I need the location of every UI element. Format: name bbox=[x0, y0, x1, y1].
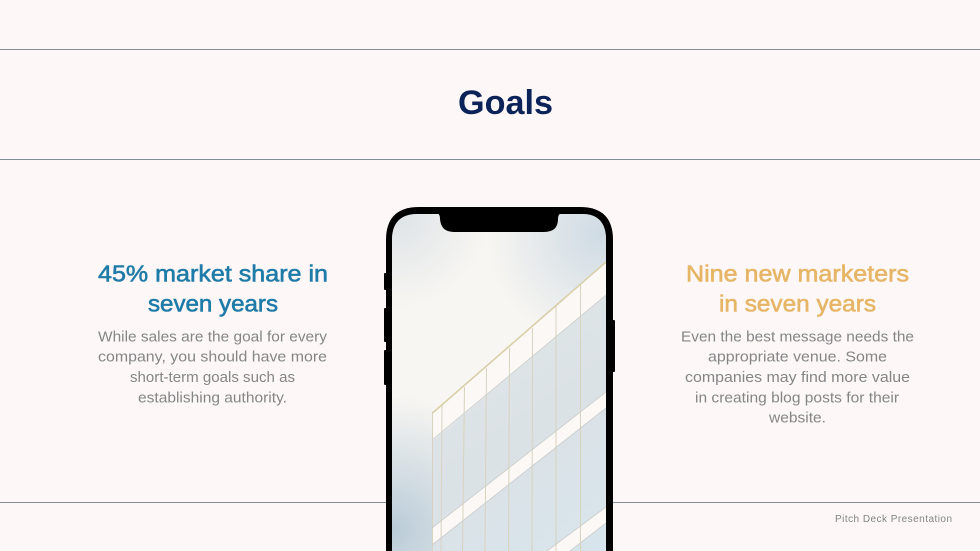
right body text: companies may find more value bbox=[685, 370, 910, 386]
roof edge bbox=[432, 262, 606, 414]
right body text: website. bbox=[768, 410, 826, 426]
phone body bbox=[386, 207, 613, 551]
mullions bbox=[432, 285, 580, 551]
left body text: short-term goals such as bbox=[130, 370, 295, 386]
right body text bbox=[681, 330, 914, 426]
left heading: 45% market share in bbox=[98, 260, 328, 286]
right goal block bbox=[681, 260, 914, 426]
building glass bbox=[432, 295, 606, 551]
phone notch bbox=[436, 213, 563, 232]
right heading: in seven years bbox=[719, 290, 876, 316]
left heading bbox=[98, 260, 328, 316]
right heading: Nine new marketers bbox=[686, 260, 909, 286]
right body text: appropriate venue. Some bbox=[708, 350, 887, 366]
right body text: in creating blog posts for their bbox=[695, 390, 899, 406]
right heading bbox=[686, 260, 909, 316]
phone mockup bbox=[384, 207, 615, 551]
title: Goals bbox=[458, 84, 553, 122]
left goal block bbox=[98, 260, 328, 406]
left body text: While sales are the goal for every bbox=[98, 330, 328, 346]
band edge lines bbox=[432, 295, 606, 551]
right body text: Even the best message needs the bbox=[681, 330, 914, 346]
footer label: Pitch Deck Presentation bbox=[835, 514, 952, 525]
white floor bands bbox=[432, 263, 606, 551]
phone screen photo: building against sky bbox=[392, 214, 606, 551]
phone side buttons bbox=[384, 273, 615, 385]
left body text: establishing authority. bbox=[138, 390, 287, 406]
left heading: seven years bbox=[148, 290, 278, 316]
left body text bbox=[98, 330, 328, 406]
left body text: company, you should have more bbox=[98, 350, 327, 366]
